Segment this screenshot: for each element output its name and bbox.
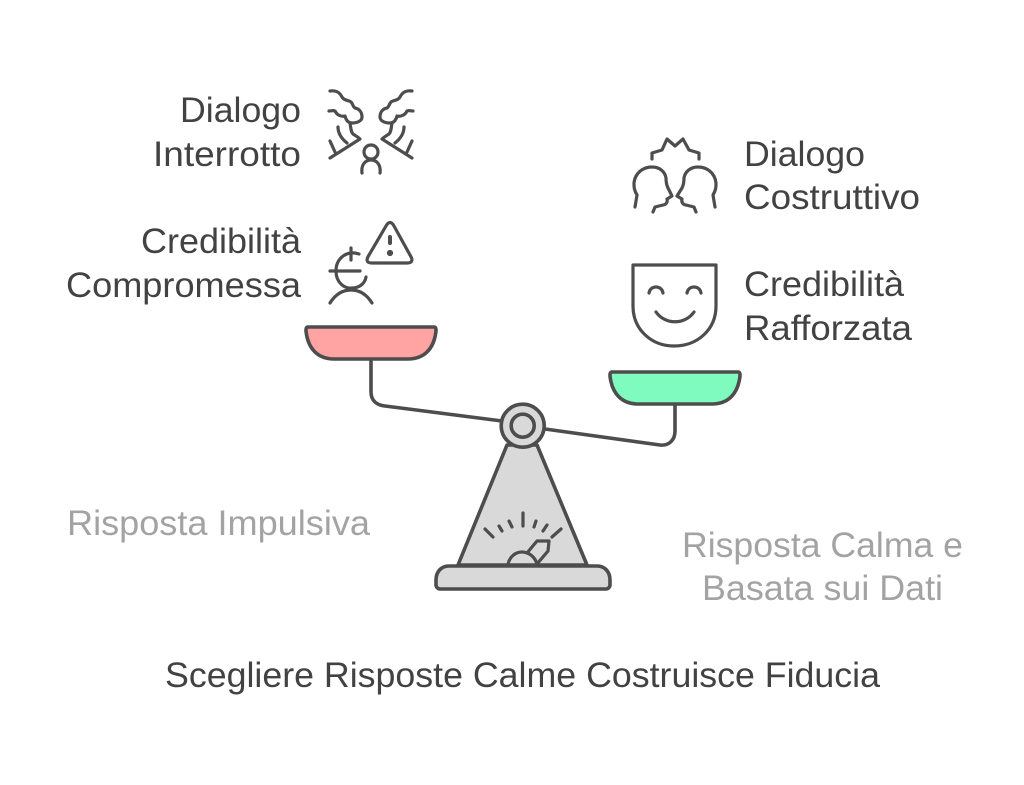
label: Risposta Calma e Basata sui Dati: Basata sui Dati [702, 569, 943, 608]
right pan: green [610, 372, 740, 404]
icon: euro person with warning triangle [330, 222, 412, 303]
gauge [485, 513, 561, 564]
label: Dialogo Interrotto: Interrotto [153, 135, 301, 174]
label: Risposta Calma e Basata sui Dati: Risposta Calma e [682, 526, 963, 565]
label: Dialogo Costruttivo [744, 135, 920, 217]
label: Credibilità Compromessa: Compromessa [66, 266, 302, 305]
label: Risposta Impulsiva: Risposta Impulsiva [67, 504, 371, 543]
left pan: red [306, 327, 436, 359]
label: Dialogo Interrotto: Dialogo [180, 91, 301, 130]
label: Credibilità Rafforzata: Credibilità [744, 265, 905, 304]
icon: two heads facing with spark [634, 139, 716, 212]
title: Scegliere Risposte Calme Costruisce Fiducia [165, 656, 881, 695]
label: Dialogo Costruttivo: Costruttivo [744, 178, 920, 217]
scale stand with gauge [436, 404, 610, 589]
label: Credibilità Compromessa [66, 222, 302, 305]
icon: trees split around a person [329, 91, 413, 173]
label: Dialogo Interrotto [153, 91, 301, 174]
label: Risposta Calma e Basata sui Dati [682, 526, 963, 608]
label: Dialogo Costruttivo: Dialogo [744, 135, 865, 174]
label: Credibilità Rafforzata: Rafforzata [744, 309, 913, 348]
icon: smiling mask [633, 265, 716, 346]
label: Credibilità Compromessa: Credibilità [141, 222, 302, 261]
pivot [501, 404, 544, 447]
label: Credibilità Rafforzata [744, 265, 913, 348]
scale beam [371, 360, 675, 445]
